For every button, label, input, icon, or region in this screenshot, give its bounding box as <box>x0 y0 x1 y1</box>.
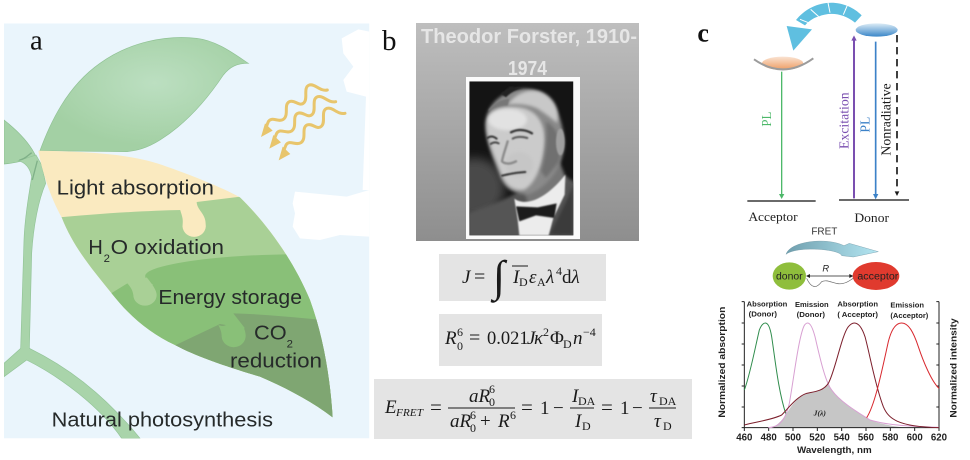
equation: FRET efficiency: τ <box>650 386 658 407</box>
panel c: energy transfer diagrams <box>697 3 959 455</box>
neck <box>524 161 566 206</box>
curve labels: (Acceptor) <box>890 313 928 320</box>
equation: spectral overlap J: λ <box>545 267 554 288</box>
excitation arrow <box>836 35 857 198</box>
curve labels: Absorption <box>747 301 787 308</box>
equation: FRET efficiency: 0 <box>489 395 495 409</box>
portrait title: 1974 <box>508 58 548 80</box>
head base <box>485 89 564 194</box>
donor ground state <box>839 200 909 225</box>
equation: Forster radius: 0.021 <box>487 329 529 349</box>
x axis tick labels: 520 <box>809 432 825 443</box>
lit face <box>487 107 545 190</box>
curve labels <box>747 301 928 320</box>
donor PL arrow: PL <box>857 117 872 133</box>
FRET schematic <box>773 226 899 290</box>
energy level diagram <box>697 3 909 225</box>
curved FRET arrow <box>786 241 878 257</box>
letter c: c <box>697 19 709 48</box>
equation: FRET efficiency: τ <box>654 411 662 432</box>
panel b: Theodor Forster and FRET equations <box>374 23 692 439</box>
equation: Forster radius: J <box>527 328 537 349</box>
equation: FRET efficiency: aR <box>469 386 490 407</box>
equation: FRET efficiency: R <box>497 411 510 432</box>
spectral overlap chart <box>717 301 959 455</box>
equation: FRET efficiency: 6 <box>489 382 495 396</box>
acceptor PL arrow: PL <box>759 112 774 127</box>
equation: spectral overlap J: ∫ <box>490 252 508 303</box>
connector: light to water <box>180 202 206 237</box>
eyes, nose and mouth <box>487 130 532 176</box>
right side shadow and ear <box>541 121 560 178</box>
x axis tick labels <box>736 432 947 443</box>
equation: FRET efficiency: 6 <box>510 408 516 422</box>
FRET schematic and spectra <box>717 226 959 455</box>
donor PL arrow <box>857 42 878 199</box>
x axis tick labels: 600 <box>907 432 923 443</box>
equation: FRET efficiency: D <box>582 419 591 433</box>
connector: water to storage <box>127 277 157 306</box>
equation: spectral overlap J: dλ <box>562 267 580 288</box>
curve labels: ( Acceptor) <box>837 312 878 319</box>
bow tie <box>516 203 557 221</box>
equation: FRET efficiency: FRET <box>395 407 424 419</box>
curve labels: Emission <box>890 303 924 310</box>
curve labels: (Donor) <box>797 312 825 319</box>
excitation arrow: Excitation <box>836 92 851 149</box>
equation: Forster radius <box>439 314 602 366</box>
leaf labels: H <box>88 237 103 259</box>
equation: Forster radius: −4 <box>583 325 596 339</box>
equation: spectral overlap J: D <box>519 275 528 289</box>
equation: Forster radius: Φ <box>550 328 564 349</box>
hair <box>508 91 558 123</box>
white background blobs <box>293 29 369 240</box>
equation: spectral overlap J: = <box>474 266 485 288</box>
x axis tick labels: 480 <box>761 432 777 443</box>
equation: FRET efficiency: I <box>574 411 583 432</box>
equation: FRET efficiency: 6 <box>470 408 476 422</box>
left axis title: Normalized absorption <box>717 306 727 418</box>
equation: FRET efficiency: − <box>632 398 643 419</box>
equation: FRET efficiency: E <box>384 397 397 418</box>
leaf labels <box>52 177 322 432</box>
overlap area <box>772 384 907 428</box>
curve labels: (Donor) <box>749 312 777 319</box>
acceptor ground state: Acceptor <box>748 210 798 224</box>
emission donor curve <box>768 323 939 428</box>
equation: Forster radius: R <box>444 328 457 349</box>
equation: FRET efficiency: aR <box>450 411 472 432</box>
curve labels: Absorption <box>837 302 878 309</box>
donor ground state: Donor <box>854 211 890 225</box>
equation: Forster radius: 0 <box>457 339 463 353</box>
portrait title: Theodor Forster, 1910- <box>421 26 637 48</box>
leaf labels: reduction <box>230 350 322 372</box>
equation: FRET efficiency: 1 <box>620 398 630 419</box>
icon: light waves <box>261 85 345 160</box>
x axis tick labels: 460 <box>736 432 752 443</box>
emission acceptor curve <box>867 323 939 418</box>
donor energy level <box>856 23 898 37</box>
panel letter a: a <box>30 24 43 56</box>
equation: FRET efficiency: = <box>601 395 613 419</box>
equation: FRET efficiency: − <box>553 398 564 419</box>
distance R: R <box>822 264 829 274</box>
equation: FRET efficiency: = <box>430 395 442 419</box>
collar and shirt <box>514 175 565 235</box>
donor: donor <box>776 271 803 282</box>
letter b: b <box>382 25 396 57</box>
equation: Forster radius: 2 <box>543 325 549 339</box>
leaf labels: Energy storage <box>158 287 302 309</box>
absorption donor curve <box>744 323 786 414</box>
stem joint lines <box>19 153 37 180</box>
equation: Forster radius: D <box>563 337 572 351</box>
transfer arrow <box>787 3 862 51</box>
equation: FRET efficiency: 1 <box>540 398 550 419</box>
equation: FRET efficiency: DA <box>578 394 596 408</box>
equation: spectral overlap J: J <box>462 267 472 288</box>
leaf labels: Light absorption <box>57 177 214 199</box>
connector: storage to reduction <box>218 325 246 348</box>
equation: FRET efficiency: + <box>480 411 491 432</box>
acceptor PL arrow <box>759 72 784 199</box>
equation: FRET efficiency <box>374 379 692 439</box>
acceptor energy level <box>754 57 813 70</box>
equation: FRET efficiency: DA <box>659 394 677 408</box>
portrait panel <box>416 23 639 241</box>
equation: spectral overlap J: 4 <box>556 264 562 278</box>
x axis tick labels: 620 <box>931 432 947 443</box>
equation: spectral overlap J: I <box>512 267 521 288</box>
nonradiative arrow <box>879 35 899 196</box>
leaf labels: Natural photosynthesis <box>52 410 273 432</box>
photo of Theodor Forster <box>466 77 580 239</box>
FRET schematic: FRET <box>811 226 837 237</box>
leaf labels: CO <box>254 322 287 344</box>
equation: spectral overlap J: ε <box>529 267 537 288</box>
equation: spectral overlap J <box>439 252 606 303</box>
equation: FRET efficiency: I <box>571 386 580 407</box>
right axis title: Normalized intensity <box>949 317 959 418</box>
leaf labels: O oxidation <box>111 237 224 259</box>
suit <box>468 176 576 238</box>
equation: Forster radius: n <box>573 328 582 349</box>
portrait title <box>421 26 637 80</box>
absorption acceptor curve <box>744 323 939 428</box>
small left leaf <box>4 120 36 164</box>
acceptor ground state <box>747 201 816 224</box>
equation: FRET efficiency: 0 <box>470 421 476 435</box>
equation: FRET efficiency: D <box>663 419 672 433</box>
nonradiative arrow: Nonradiative <box>879 83 894 156</box>
main leaf with four process bands <box>38 150 333 418</box>
equation: spectral overlap J: A <box>537 275 546 289</box>
leaf labels: 2 <box>104 253 110 265</box>
acceptor: acceptor <box>857 272 899 283</box>
x axis tick labels: 540 <box>834 432 850 443</box>
axes <box>742 302 939 431</box>
panel a: natural photosynthesis leaf <box>4 23 369 438</box>
plant stem <box>4 155 140 438</box>
overlap label: J(λ) <box>813 409 826 418</box>
x axis title: Wavelength, nm <box>797 445 872 455</box>
equation: Forster radius: κ <box>534 328 544 349</box>
x axis tick labels: 580 <box>882 432 898 443</box>
x axis tick labels: 500 <box>785 432 801 443</box>
top leaf <box>40 38 248 152</box>
leaf labels: 2 <box>287 338 293 350</box>
equation: Forster radius: = <box>469 327 480 349</box>
equation: Forster radius: 6 <box>457 325 463 339</box>
curve labels: Emission <box>795 302 829 309</box>
x axis tick labels: 560 <box>858 432 874 443</box>
equation: FRET efficiency: = <box>521 395 533 419</box>
